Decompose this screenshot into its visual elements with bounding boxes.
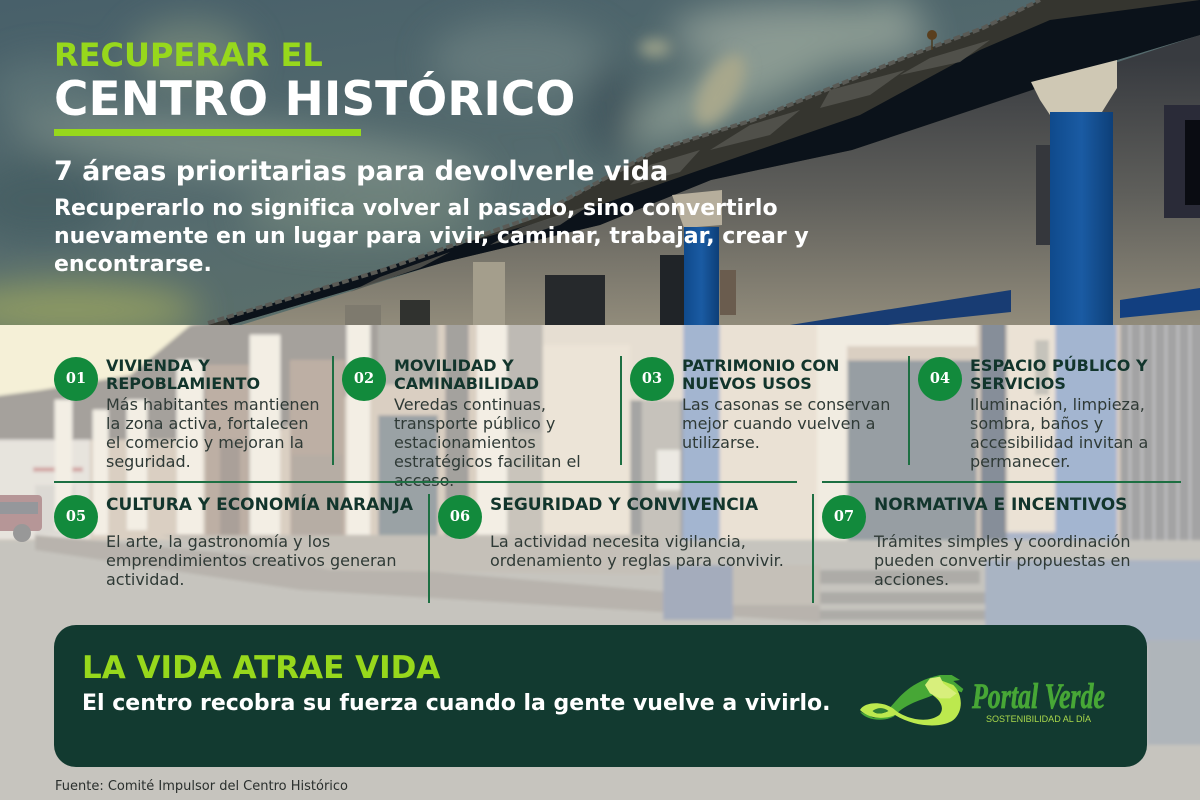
callout text: El centro recobra su fuerza cuando la gente vuelve a vivirlo. bbox=[82, 691, 830, 716]
body 01: seguridad. bbox=[106, 452, 191, 471]
divider 5 bbox=[428, 494, 430, 603]
number badge 07: 07 bbox=[834, 508, 854, 525]
heading 06: SEGURIDAD Y CONVIVENCIA bbox=[490, 495, 758, 515]
number badge 02 bbox=[342, 357, 386, 401]
body 04: Iluminación, limpieza, bbox=[970, 395, 1145, 414]
divider 1 bbox=[332, 356, 334, 465]
body 03 bbox=[682, 395, 890, 452]
wall bbox=[225, 35, 1200, 330]
body 02: acceso. bbox=[394, 471, 454, 490]
heading 04: SERVICIOS bbox=[970, 374, 1066, 393]
divider 3 bbox=[908, 356, 910, 465]
number badge 07 bbox=[822, 495, 866, 539]
heading 05: CULTURA Y ECONOMÍA NARANJA bbox=[106, 495, 413, 515]
roof plant bbox=[931, 38, 933, 50]
number badge 02: 02 bbox=[354, 370, 374, 387]
body 03: Las casonas se conservan bbox=[682, 395, 890, 414]
body 04: permanecer. bbox=[970, 452, 1071, 471]
street bbox=[0, 535, 1200, 800]
body 06: La actividad necesita vigilancia, bbox=[490, 532, 746, 551]
body 01: Más habitantes mantienen bbox=[106, 395, 320, 414]
body 05: emprendimientos creativos generan bbox=[106, 551, 396, 570]
body 01: la zona activa, fortalecen bbox=[106, 414, 308, 433]
intro text bbox=[54, 196, 809, 277]
number badge 04: 04 bbox=[930, 370, 950, 387]
lintels bbox=[790, 290, 1011, 330]
logo: Portal Verde bbox=[860, 675, 1105, 726]
title bbox=[54, 36, 575, 136]
body 02: estratégicos facilitan el bbox=[394, 452, 581, 471]
heading 03 bbox=[682, 356, 839, 393]
car bbox=[0, 495, 42, 531]
item 06 bbox=[438, 495, 784, 570]
row divider left bbox=[54, 481, 797, 483]
item 04 bbox=[918, 356, 1148, 471]
body 02 bbox=[394, 395, 581, 490]
pillars and shutters left bbox=[473, 262, 505, 332]
body 07: Trámites simples y coordinación bbox=[874, 532, 1131, 551]
row divider right bbox=[822, 481, 1181, 483]
heading 03: PATRIMONIO CON bbox=[682, 356, 839, 375]
item 05 bbox=[54, 494, 413, 589]
body 02: estacionamientos bbox=[394, 433, 536, 452]
number badge 04 bbox=[918, 357, 962, 401]
number badge 06 bbox=[438, 495, 482, 539]
roof bbox=[208, 0, 1200, 325]
heading 04: ESPACIO PÚBLICO Y bbox=[970, 356, 1148, 375]
callout panel bbox=[54, 625, 1147, 767]
divider 6 bbox=[812, 494, 814, 603]
body 04: sombra, baños y bbox=[970, 414, 1103, 433]
item 01 bbox=[54, 356, 320, 471]
intro text: encontrarse. bbox=[54, 252, 212, 277]
number badge 05: 05 bbox=[66, 508, 86, 525]
body 02: transporte público y bbox=[394, 414, 555, 433]
body 05: actividad. bbox=[106, 570, 184, 589]
callout heading: LA VIDA ATRAE VIDA bbox=[82, 650, 440, 686]
number badge 03: 03 bbox=[642, 370, 662, 387]
light band overlay bbox=[0, 325, 1200, 800]
heading 07: NORMATIVA E INCENTIVOS bbox=[874, 495, 1127, 515]
heading 02 bbox=[394, 356, 539, 393]
body 03: mejor cuando vuelven a bbox=[682, 414, 875, 433]
right window bbox=[1164, 105, 1200, 218]
body 02: Veredas continuas, bbox=[394, 395, 546, 414]
item 07 bbox=[822, 495, 1131, 589]
body 03: utilizarse. bbox=[682, 433, 760, 452]
body 07: pueden convertir propuestas en bbox=[874, 551, 1130, 570]
title underline bbox=[54, 129, 361, 136]
body 04: accesibilidad invitan a bbox=[970, 433, 1148, 452]
divider 2 bbox=[620, 356, 622, 465]
icon: infinity and hand bbox=[860, 675, 963, 725]
title line: Recuperar el: RECUPERAR EL bbox=[54, 36, 323, 74]
heading 03: NUEVOS USOS bbox=[682, 374, 812, 393]
body 01 bbox=[106, 395, 320, 471]
number badge 06: 06 bbox=[450, 508, 470, 525]
body 04 bbox=[970, 395, 1148, 471]
number badge 03 bbox=[630, 357, 674, 401]
item 02 bbox=[342, 356, 581, 490]
logo tagline: SOSTENIBILIDAD AL DÍA bbox=[986, 714, 1092, 725]
intro text: nuevamente en un lugar para vivir, caminar, trabajar, crear y bbox=[54, 224, 809, 249]
body 06 bbox=[490, 532, 784, 570]
body 06: ordenamiento y reglas para convivir. bbox=[490, 551, 784, 570]
heading 01 bbox=[106, 356, 260, 393]
number badge 01 bbox=[54, 357, 98, 401]
body 05: El arte, la gastronomía y los bbox=[106, 532, 330, 551]
big column top bbox=[1031, 60, 1117, 118]
number badge 05 bbox=[54, 495, 98, 539]
subtitle: 7 áreas prioritarias para devolverle vida bbox=[54, 156, 668, 187]
intro text: Recuperarlo no significa volver al pasado, sino convertirlo bbox=[54, 196, 778, 221]
body 07 bbox=[874, 532, 1131, 589]
body 05 bbox=[106, 532, 396, 589]
heading 01: VIVIENDA Y bbox=[106, 356, 210, 375]
body 01: el comercio y mejoran la bbox=[106, 433, 304, 452]
title line: Centro Histórico: CENTRO HISTÓRICO bbox=[54, 72, 575, 127]
heading 04 bbox=[970, 356, 1148, 393]
lower building bbox=[0, 300, 1200, 800]
source note: Fuente: Comité Impulsor del Centro Histórico bbox=[55, 779, 348, 794]
heading 02: MOVILIDAD Y bbox=[394, 356, 514, 375]
heading 02: CAMINABILIDAD bbox=[394, 374, 539, 393]
heading 01: REPOBLAMIENTO bbox=[106, 374, 260, 393]
number badge 01: 01 bbox=[66, 370, 86, 387]
body 07: acciones. bbox=[874, 570, 949, 589]
small column bbox=[672, 190, 722, 228]
item 03 bbox=[630, 356, 890, 452]
